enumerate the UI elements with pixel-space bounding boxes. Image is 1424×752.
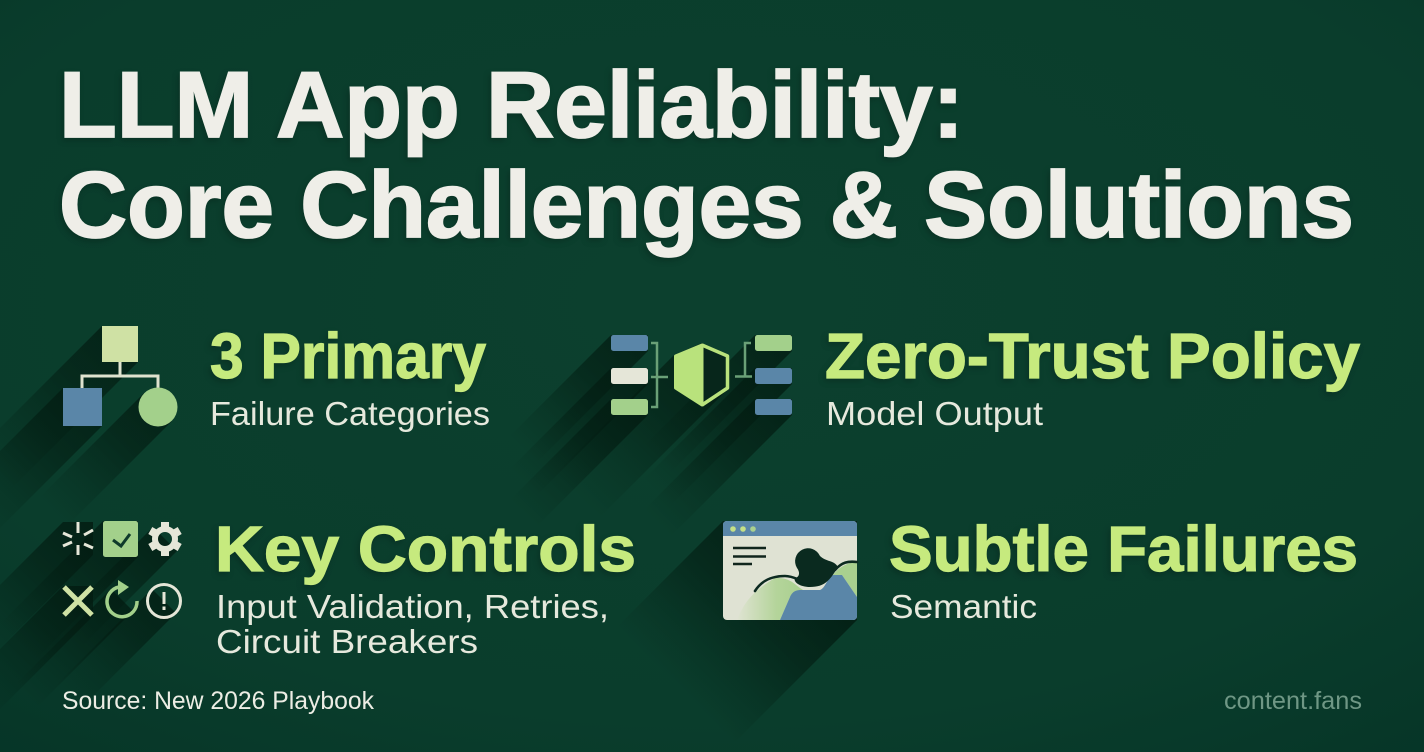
heading: zero-trust policy: Zero-Trust Policy [825, 320, 1360, 392]
title [59, 52, 1354, 257]
text: semantic: Semantic [890, 588, 1037, 625]
icon: control symbols grid [0, 521, 180, 738]
icon: hierarchy diagram [0, 326, 178, 556]
heading: 3 Primary: 3 Primary [210, 320, 486, 392]
text: input validation, retries, circuit breakers: Input Validation, Retries, [216, 588, 609, 625]
text: input validation, retries, circuit breakers: Circuit Breakers [216, 623, 478, 660]
text: failure categories: Failure Categories [210, 395, 490, 432]
icon: shield with input and output blocks [486, 335, 792, 550]
panel: key controls [0, 513, 636, 738]
icon: browser window with landscape [593, 521, 857, 750]
brand: content.fans: content.fans [1224, 687, 1362, 715]
panel: zero-trust policy [486, 320, 1360, 550]
heading: subtle failures: Subtle Failures [889, 513, 1358, 585]
heading: key controls: Key Controls [215, 513, 636, 585]
panel: subtle failures [593, 513, 1358, 750]
text: model output: Model Output [826, 395, 1043, 432]
text: input validation, retries, circuit breakers [216, 588, 609, 660]
panel: 3 primary failure categories [0, 320, 490, 556]
source note: Source: New 2026 Playbook [62, 687, 374, 715]
title: LLM App Reliability: [59, 52, 964, 157]
title: Core Challenges & Solutions [59, 152, 1354, 257]
